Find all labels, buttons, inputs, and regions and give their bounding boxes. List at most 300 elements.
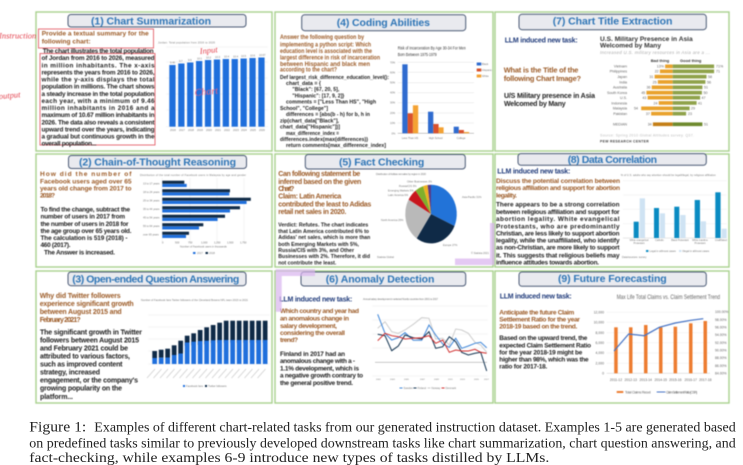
question text: experience significant growth: [40, 301, 134, 308]
bar chart: population of Jordan: 2017: [179, 128, 185, 132]
question text: How did the number of: [40, 171, 132, 178]
grouped bar chart: risk of incarceration: Black: [482, 62, 489, 66]
answer text: Finland in 2017 had an: [280, 351, 345, 358]
diverging bar chart: U.S. military presence: 45: [641, 91, 645, 95]
line chart: salary development: Denmark: [446, 386, 457, 390]
python code: Def largest_risk_difference_education_level():: [280, 75, 389, 81]
answer text: [499, 335, 591, 371]
question text: Facebook users aged over 65: [40, 178, 132, 185]
python code: chart_data["Hispanic"])]: [280, 124, 340, 130]
grouped bar chart: risk of incarceration: [390, 46, 493, 140]
combo chart: total claims and settlement ratio: 4,000: [596, 351, 604, 355]
question text: between August 2015 and: [40, 309, 122, 316]
bar chart: population of Jordan: 10.4: [233, 54, 239, 58]
bar chart: population of Jordan: 10.5: [241, 54, 247, 58]
answer text: expected Claim Settlement Ratio: [499, 342, 591, 349]
python code: max_difference_index =: [286, 131, 340, 137]
python code: chart_data = {: [286, 81, 322, 87]
grouped bar chart: abortion legality by religion: White evangelical: [630, 239, 649, 242]
diverging bar chart: U.S. military presence: 34: [648, 123, 652, 127]
grouped bar chart: risk of incarceration: 0%: [392, 131, 396, 135]
question text: between Hispanic and black men: [280, 62, 370, 68]
figure caption: Examples of different chart-related tasks from our generated instruction dataset. Examples 1-5 are generated based: [94, 421, 736, 436]
horizontal bar chart: Facebook users by age: Distribution of the total number of Facebook users in Malaysia by age and gender: [140, 173, 246, 177]
diverging bar chart: U.S. military presence: MEDIAN: [613, 123, 627, 127]
instruction box: following chart:: [42, 39, 91, 46]
bar chart: population of Jordan: 9.46: [170, 60, 176, 64]
answer text: ratio for 2017-18.: [499, 364, 548, 371]
heading: data correlation: [518, 154, 706, 166]
diverging bar chart: U.S. military presence: PEW RESEARCH CENTER: [600, 139, 649, 143]
pie chart: Adidas net sales by region: North America 25%: [381, 218, 404, 222]
pie chart: Adidas net sales by region: Distribution of Adidas net sales by region in 2020: [376, 172, 427, 176]
answer text: 460 (2017).: [40, 242, 71, 249]
combo chart: total claims and settlement ratio: Claim Settlement Ratio (CSR): [666, 390, 697, 394]
line chart: salary development: 2013: [460, 379, 466, 381]
grouped bar chart: risk of incarceration: White: [482, 74, 489, 78]
stacked bar chart: Facebook fans and Twitter followers: Number of Facebook fans Twitter followers of the Cleveland Browns NFL team 2015 to 2021: [141, 298, 249, 302]
question text: Which country and year had: [280, 308, 359, 315]
question text: 2018-19 based on the trend.: [499, 324, 577, 331]
heading: future forecasting: [519, 272, 706, 286]
heading: fact checking: (5) Fact Checking: [339, 156, 424, 168]
question text: largest difference in risk of incarceration: [280, 55, 380, 61]
answer text: [504, 93, 595, 108]
line chart: salary development: Annual salary development in selected Nordic countries from 2001 to 2017: [363, 297, 439, 301]
diverging bar chart: U.S. military presence: 51: [704, 123, 708, 127]
bar chart: population of Jordan: 10.67: [259, 53, 266, 57]
combo chart: total claims and settlement ratio: 98.00%: [715, 318, 726, 322]
grouped bar chart: abortion legality by religion: Protestant: [695, 242, 706, 245]
answer text: the number of users in 2018 for: [40, 221, 129, 228]
combo chart: total claims and settlement ratio: 96.00%: [715, 326, 726, 330]
combo chart: total claims and settlement ratio: 92.00%: [715, 341, 726, 345]
answer text: growing popularity on the: [40, 386, 122, 393]
question and claim text: Chart?: [278, 186, 294, 193]
verdict text: Adidas' net sales, which is more than: [278, 235, 371, 241]
grouped bar chart: risk of incarceration: 40%: [390, 91, 396, 95]
bar chart: population of Jordan: 2021: [215, 128, 221, 132]
verdict text: Verdict: Refutes. The chart indicates: [278, 223, 368, 229]
output text box: population in millions. The chart shows: [42, 84, 155, 91]
grouped bar chart: abortion legality by religion: Black Protestant: [671, 239, 689, 242]
combo chart: total claims and settlement ratio: 2015-16: [669, 378, 682, 382]
diverging bar chart: U.S. military presence: 36: [646, 86, 650, 90]
question text: trend?: [280, 337, 298, 344]
grouped bar chart: abortion legality by religion: White mainline: [692, 239, 709, 242]
combo chart: total claims and settlement ratio: [594, 295, 728, 394]
question text: legality.: [496, 192, 517, 199]
diverging bar chart: U.S. military presence: 56: [707, 80, 711, 84]
instruction box: Provide a textual summary for the: [42, 31, 149, 38]
verdict text: Russia/CIS with 3%, and Other: [278, 248, 355, 254]
stacked bar chart: Facebook fans and Twitter followers: Twitter followers: [208, 384, 227, 388]
bar chart: population of Jordan: 10.1: [197, 56, 203, 60]
answer text: such as improved content: [40, 361, 123, 368]
bar chart: population of Jordan: 10.6: [250, 54, 256, 58]
combo chart: total claims and settlement ratio: 12,000: [594, 310, 604, 314]
panel: (9) future forecasting: [495, 271, 729, 403]
diverging bar chart: U.S. military presence: 25: [653, 80, 657, 84]
grouped bar chart: risk of incarceration: Less Than HS: [402, 136, 418, 140]
bar chart: population of Jordan: 2025: [250, 128, 256, 132]
output text box: represents the years from 2016 to 2026,: [42, 69, 155, 76]
answer text: influence attitudes towards abortion.: [496, 259, 599, 266]
line chart: salary development: 2007: [420, 379, 426, 381]
combo chart: total claims and settlement ratio: 2,000: [596, 362, 604, 366]
output text box: upward trend over the years, indicating: [42, 126, 155, 133]
diverging bar chart: U.S. military presence: 24: [654, 101, 658, 105]
diverging bar chart: U.S. military presence: South Korea: [607, 91, 627, 95]
heading: chart summarization: [68, 14, 246, 27]
bar chart: population of Jordan: 10.2: [206, 56, 212, 60]
panel: (2) chain-of-thought reasoning: [36, 154, 272, 267]
question text: Discuss the potential correlation between: [496, 178, 620, 185]
answer text: anomalous change with a -: [280, 358, 355, 365]
verdict text: [278, 223, 371, 267]
answer text: as non-Christian, are more likely to support: [496, 245, 620, 252]
diverging bar chart: U.S. military presence: 43: [642, 96, 646, 100]
bar chart: population of Jordan: 9.7: [179, 59, 183, 63]
question text: Why did Twitter followers: [40, 293, 121, 300]
verdict text: Businesses with 2%. Therefore, it did: [278, 254, 371, 260]
pie chart: Adidas net sales by region: Europe 27%: [443, 243, 458, 247]
label: LLM induced new task: LLM induced new task:: [279, 297, 352, 304]
question text: February 2021?: [40, 317, 81, 324]
answer text: higher than 98%, which was the: [499, 357, 589, 364]
heading: chart title extraction: (7) Chart Title Extraction: [553, 15, 672, 27]
horizontal bar chart: Facebook users by age: [140, 173, 251, 255]
horizontal bar chart: Facebook users by age: 18 to 24 years: [143, 190, 160, 194]
panel: (3) open-ended question answering: [36, 271, 272, 403]
heading: data correlation: (8) Data Correlation: [568, 154, 657, 166]
diverging bar chart: U.S. military presence: 37: [646, 112, 650, 116]
panel: (4) coding abilities: [275, 12, 493, 151]
answer text: engagement, or the company's: [40, 378, 138, 385]
question text: religious affiliation and support for abortion: [496, 185, 620, 192]
question text: Answer the following question by: [280, 35, 365, 41]
bar chart: population of Jordan: 2022: [224, 128, 230, 132]
grouped bar chart: abortion legality by religion: [621, 173, 728, 259]
handwritten note: chart: Chart: [194, 86, 219, 99]
question text: following Chart Image?: [504, 74, 581, 83]
combo chart: total claims and settlement ratio: 94.00%: [715, 333, 726, 337]
grouped bar chart: risk of incarceration: Hispanic: [482, 68, 493, 72]
horizontal bar chart: Facebook users by age: over 65 years: [143, 232, 159, 236]
diverging bar chart: U.S. military presence: U.S. Military Presence in Asia: [600, 36, 693, 43]
panel: (5) fact checking: [275, 154, 493, 267]
diverging bar chart: U.S. military presence: Increased U.S. military resources in Asia are a ...: [600, 50, 710, 55]
horizontal bar chart: Facebook users by age: 25 to 34 years: [143, 198, 160, 202]
output text box: The chart illustrates the total population: [43, 48, 154, 55]
combo chart: total claims and settlement ratio: Total Claims Recvd: [625, 390, 651, 394]
question and claim text: inferred based on the given: [278, 179, 361, 186]
question and claim text: Can following statement be: [278, 171, 360, 178]
question text: [280, 308, 359, 344]
grouped bar chart: risk of incarceration: Born Between 1975-1979: [398, 52, 437, 57]
pie chart: Adidas net sales by region: Statista Global: [377, 255, 394, 259]
question text: Anticipate the future Claim: [499, 309, 574, 316]
horizontal bar chart: Facebook users by age: 1,500: [227, 240, 234, 244]
diverging bar chart: U.S. military presence: 71: [716, 70, 720, 74]
diverging bar chart: U.S. military presence: Welcomed by Many: [600, 43, 661, 50]
grouped bar chart: abortion legality by religion: Unaffiliated: [715, 239, 728, 242]
label: LLM induced new task: LLM induced new task:: [497, 168, 570, 175]
handwritten note: instruction: Instruction: [0, 30, 36, 40]
answer text: Welcomed by Many: [504, 101, 566, 108]
question text: an anomalous change in: [280, 316, 349, 322]
output text box: each year, with a minimum of 9.46: [42, 98, 155, 105]
combo chart: total claims and settlement ratio: 0: [602, 372, 604, 376]
panel: (6) anomaly detection: [275, 271, 493, 403]
question and claim text: [278, 171, 371, 216]
question text: education level is associated with the: [280, 49, 373, 55]
output text box: a gradual but continuous growth in the: [42, 134, 155, 141]
panel: (1) chart summarization: [36, 12, 272, 151]
question text: [499, 309, 580, 331]
bar chart: population of Jordan: 2023: [233, 128, 239, 132]
question and claim text: contributed the least to Adidas: [278, 202, 371, 208]
grouped bar chart: risk of incarceration: 60%: [390, 70, 396, 74]
heading: anomaly detection: (6) Anomaly Detection: [326, 274, 434, 286]
line chart: salary development: 2015: [474, 379, 480, 381]
bar chart: population of Jordan: 10.4: [224, 54, 230, 58]
instruction box: [38, 29, 154, 48]
pie chart: Adidas net sales by region: Emerging Markets 5%: [388, 188, 414, 192]
grouped bar chart: abortion legality by religion: Data/sources: survey: [622, 255, 647, 259]
diverging bar chart: U.S. military presence: 47: [702, 96, 706, 100]
output text box: 2026. The data also reveals a consistent: [42, 119, 155, 126]
answer text: The Answer is increased.: [44, 249, 115, 256]
diverging bar chart: U.S. military presence: Pakistan: [613, 112, 627, 116]
question text: [496, 178, 620, 199]
handwritten note: input: Input: [198, 44, 219, 56]
grouped bar chart: abortion legality by religion: Illegal in all/most cases: [682, 249, 710, 253]
diverging bar chart: U.S. military presence: 13%: [657, 65, 665, 69]
answer text: attributed to various factors,: [40, 353, 130, 360]
question text: [280, 35, 380, 73]
diverging bar chart: U.S. military presence: 29: [691, 107, 695, 111]
diverging bar chart: U.S. military presence: India: [619, 80, 627, 84]
line chart: salary development: 2001: [376, 379, 382, 381]
answer text: number of users in 2017 from: [40, 214, 125, 221]
stacked bar chart: Facebook fans and Twitter followers: [141, 298, 270, 388]
combo chart: total claims and settlement ratio: 86.00%: [715, 364, 726, 368]
line chart: salary development: Sweden: [404, 386, 413, 390]
bar chart: population of Jordan: 2019: [197, 128, 203, 132]
diverging bar chart: U.S. military presence: Australia: [613, 86, 627, 90]
diverging bar chart: U.S. military presence: 51: [704, 86, 708, 90]
python code: "Hispanic": [17, 9, 2]}: [292, 93, 345, 99]
horizontal bar chart: Facebook users by age: 35 to 44 years: [143, 207, 160, 211]
answer text: and February 2021 could be: [40, 345, 128, 352]
horizontal bar chart: Facebook users by age: 2017: [197, 251, 203, 255]
panel: (8) data correlation: [495, 154, 729, 267]
question text: [504, 66, 581, 83]
grouped bar chart: risk of incarceration: High School: [429, 136, 443, 140]
answer text: the age group over 65 years old.: [40, 228, 132, 235]
answer text: Protestants, who are predominantly: [496, 223, 620, 230]
diverging bar chart: U.S. military presence: [600, 36, 724, 143]
combo chart: total claims and settlement ratio: 2013-14: [639, 378, 652, 382]
answer text: 1.1% development, which is: [280, 366, 359, 372]
pie chart: Adidas net sales by region: Latin America 6%: [388, 193, 409, 197]
output text box: a steady increase in the total population: [42, 91, 155, 98]
diverging bar chart: U.S. military presence: Bad thing: [651, 58, 670, 63]
horizontal bar chart: Facebook users by age: 0: [162, 240, 164, 244]
horizontal bar chart: Facebook users by age: 45 to 54 years: [143, 216, 160, 220]
diverging bar chart: U.S. military presence: 71%: [716, 65, 724, 69]
heading: coding abilities: [302, 15, 466, 31]
bar chart: population of Jordan: Jordan: Total population from 2016 to 2026: [158, 40, 216, 44]
python code: comments = ["Less Than HS", "High: [286, 99, 377, 105]
verdict text: not contribute the least.: [278, 261, 337, 267]
panel: (7) chart title extraction: [495, 12, 729, 151]
horizontal bar chart: Facebook users by age: 55 to 64 years: [143, 224, 160, 228]
diverging bar chart: U.S. military presence: 41: [698, 101, 702, 105]
horizontal bar chart: Facebook users by age: 13 to 17 years: [143, 182, 160, 186]
grouped bar chart: risk of incarceration: College: [457, 136, 466, 140]
combo chart: total claims and settlement ratio: 2012-13: [624, 378, 637, 382]
combo chart: total claims and settlement ratio: 2014-15: [654, 378, 667, 382]
heading: fact checking: [305, 154, 465, 169]
figure caption: [29, 420, 736, 465]
question text: Settlement Ratio for the year: [499, 316, 580, 323]
answer text: The calculation is 519 (2018) -: [40, 235, 128, 242]
answer text: legality, while the unaffiliated, who identify: [496, 237, 620, 244]
horizontal bar chart: Facebook users by age: 1,000: [201, 240, 208, 244]
horizontal bar chart: Facebook users by age: Number of Facebook users in thousands: [180, 244, 227, 248]
pie chart: Adidas net sales by region: Russia/CIS 3%: [399, 184, 417, 188]
label: LLM induced new task: LLM induced new task:: [500, 294, 572, 301]
grouped bar chart: abortion legality by religion: Catholic: [655, 239, 665, 242]
question text: considering the overall: [280, 330, 345, 337]
answer text: it. This suggests that religious beliefs may: [496, 252, 620, 259]
bar chart: population of Jordan: 2024: [241, 128, 247, 132]
question text: according to the chart?: [280, 67, 337, 73]
answer text: U/S Military presence in Asia: [504, 93, 595, 100]
grouped bar chart: risk of incarceration: 50%: [390, 81, 396, 85]
answer text: strategy, increased: [40, 370, 100, 377]
figure caption: on predefined tasks similar to previously developed downstream tasks like chart summarization, chart question answering, and: [29, 437, 736, 452]
answer text: for the year 2018-19 might be: [499, 349, 583, 356]
python code: "Black": [67, 20, 5],: [292, 87, 340, 93]
diverging bar chart: U.S. military presence: Philippines: [610, 70, 627, 74]
answer text: followers between August 2015: [40, 337, 139, 344]
heading: future forecasting: (9) Future Forecasting: [558, 273, 667, 285]
output text box: while the y-axis displays the total: [40, 76, 155, 84]
verdict text: both Emerging Markets with 5%,: [278, 242, 359, 248]
question and claim text: Claim: Latin America: [278, 194, 341, 200]
line chart: salary development: [363, 297, 490, 390]
heading: chain-of-thought reasoning: (2) Chain-of-Thought Reasoning: [79, 157, 236, 169]
output text box: overall population...: [42, 141, 97, 148]
line chart: salary development: 2017: [484, 379, 490, 381]
answer text: There appears to be a strong correlation: [496, 202, 620, 209]
python code: differences = [abs(b - h) for b, h in: [286, 112, 371, 118]
highlight: purple marker strokes: [276, 223, 494, 312]
horizontal bar chart: Facebook users by age: 1,250: [214, 240, 221, 244]
grouped bar chart: risk of incarceration: 10%: [390, 121, 396, 125]
question text: implementing a python script: Which: [280, 42, 371, 48]
diverging bar chart: U.S. military presence: 54: [634, 107, 638, 111]
diverging bar chart: U.S. military presence: 31: [649, 75, 653, 79]
diverging bar chart: U.S. military presence: Good thing: [680, 58, 702, 63]
python code: [280, 75, 389, 149]
answer text: a negative growth contrary to: [280, 372, 363, 380]
diverging bar chart: U.S. military presence: Source: Spring 2010 Global Attitudes survey. Q37.: [600, 134, 694, 138]
line chart: salary development: 2009: [434, 379, 440, 381]
answer text: Christian, are less likely to support abortion: [496, 230, 620, 237]
bar chart: population of Jordan: 2020: [206, 128, 212, 132]
answer text: [280, 351, 363, 387]
diverging bar chart: U.S. military presence: 50: [704, 91, 708, 95]
bar chart: population of Jordan: 2026: [259, 128, 265, 132]
heading: anomaly detection: [301, 272, 466, 286]
pie chart: Adidas net sales by region: Other Businesses 2%: [407, 180, 433, 184]
answer text: abortion legality. White evangelical: [496, 216, 620, 223]
combo chart: total claims and settlement ratio: 6,000: [596, 341, 604, 345]
combo chart: total claims and settlement ratio: 8,000: [596, 331, 604, 335]
output text box: in million inhabitants. The x-axis: [42, 62, 155, 69]
python code: differences.index(max(differences)): [280, 137, 368, 143]
question text: What is the Title of the: [504, 66, 578, 74]
combo chart: total claims and settlement ratio: 10,000: [594, 320, 604, 324]
combo chart: total claims and settlement ratio: 88.00%: [715, 356, 726, 360]
verdict text: that Latin America contributed 6% to: [278, 229, 370, 235]
combo chart: total claims and settlement ratio: 90.00%: [715, 348, 726, 352]
grouped bar chart: risk of incarceration: Risk of Incarceration By Age 30-34 For Men: [398, 46, 466, 50]
line chart: salary development: Finland: [418, 386, 427, 390]
question and claim text: retail net sales in 2020.: [278, 209, 346, 216]
grouped bar chart: risk of incarceration: 30%: [390, 101, 396, 105]
python code: zip(chart_data["Black"],: [280, 118, 339, 124]
line chart: salary development: Norway: [432, 386, 441, 390]
diverging bar chart: U.S. military presence: Indonesia: [611, 101, 627, 105]
diverging bar chart: U.S. military presence: Malaysia: [613, 107, 627, 111]
heading: chart summarization: (1) Chart Summarization: [91, 15, 211, 27]
question text: years old change from 2017 to: [40, 186, 132, 193]
question text: [40, 293, 134, 324]
combo chart: total claims and settlement ratio: 2017-18: [699, 378, 712, 382]
diverging bar chart: U.S. military presence: U.S.: [620, 96, 627, 100]
question text: 2018?: [40, 193, 55, 200]
output text box: of Jordan from 2016 to 2026, measured: [42, 55, 155, 62]
stacked bar chart: Facebook fans and Twitter followers: Facebook fans: [186, 384, 204, 388]
output text box: million inhabitants in 2016 and a: [42, 105, 155, 112]
horizontal bar chart: Facebook users by age: 750: [188, 240, 193, 244]
heading: chart title extraction: [519, 14, 706, 30]
diverging bar chart: U.S. military presence: Vietnam: [614, 65, 627, 69]
line chart: salary development: 2011: [448, 379, 453, 381]
label: LLM induced new task: LLM induced new task:: [505, 38, 578, 45]
figure caption: Figure 1:: [29, 420, 86, 436]
answer text: To find the change, subtract the: [40, 206, 130, 214]
combo chart: total claims and settlement ratio: 2011-12: [610, 378, 622, 382]
combo chart: total claims and settlement ratio: 100.00%: [715, 310, 728, 314]
pie chart: Adidas net sales by region: Asia-Pacific 31%: [462, 195, 482, 199]
horizontal bar chart: Facebook users by age: 500: [175, 240, 180, 244]
question text: salary development,: [280, 323, 337, 330]
answer text: [40, 329, 142, 401]
answer text: between religious affiliation and support for: [496, 209, 620, 216]
python code: School", "College"]: [280, 106, 328, 112]
diverging bar chart: U.S. military presence: Japan: [617, 75, 627, 79]
diverging bar chart: U.S. military presence: 22: [655, 70, 659, 74]
grouped bar chart: risk of incarceration: 70%: [390, 60, 396, 64]
answer text: Based on the upward trend, the: [499, 335, 588, 342]
heading: coding abilities: (4) Coding Abilities: [337, 17, 430, 29]
